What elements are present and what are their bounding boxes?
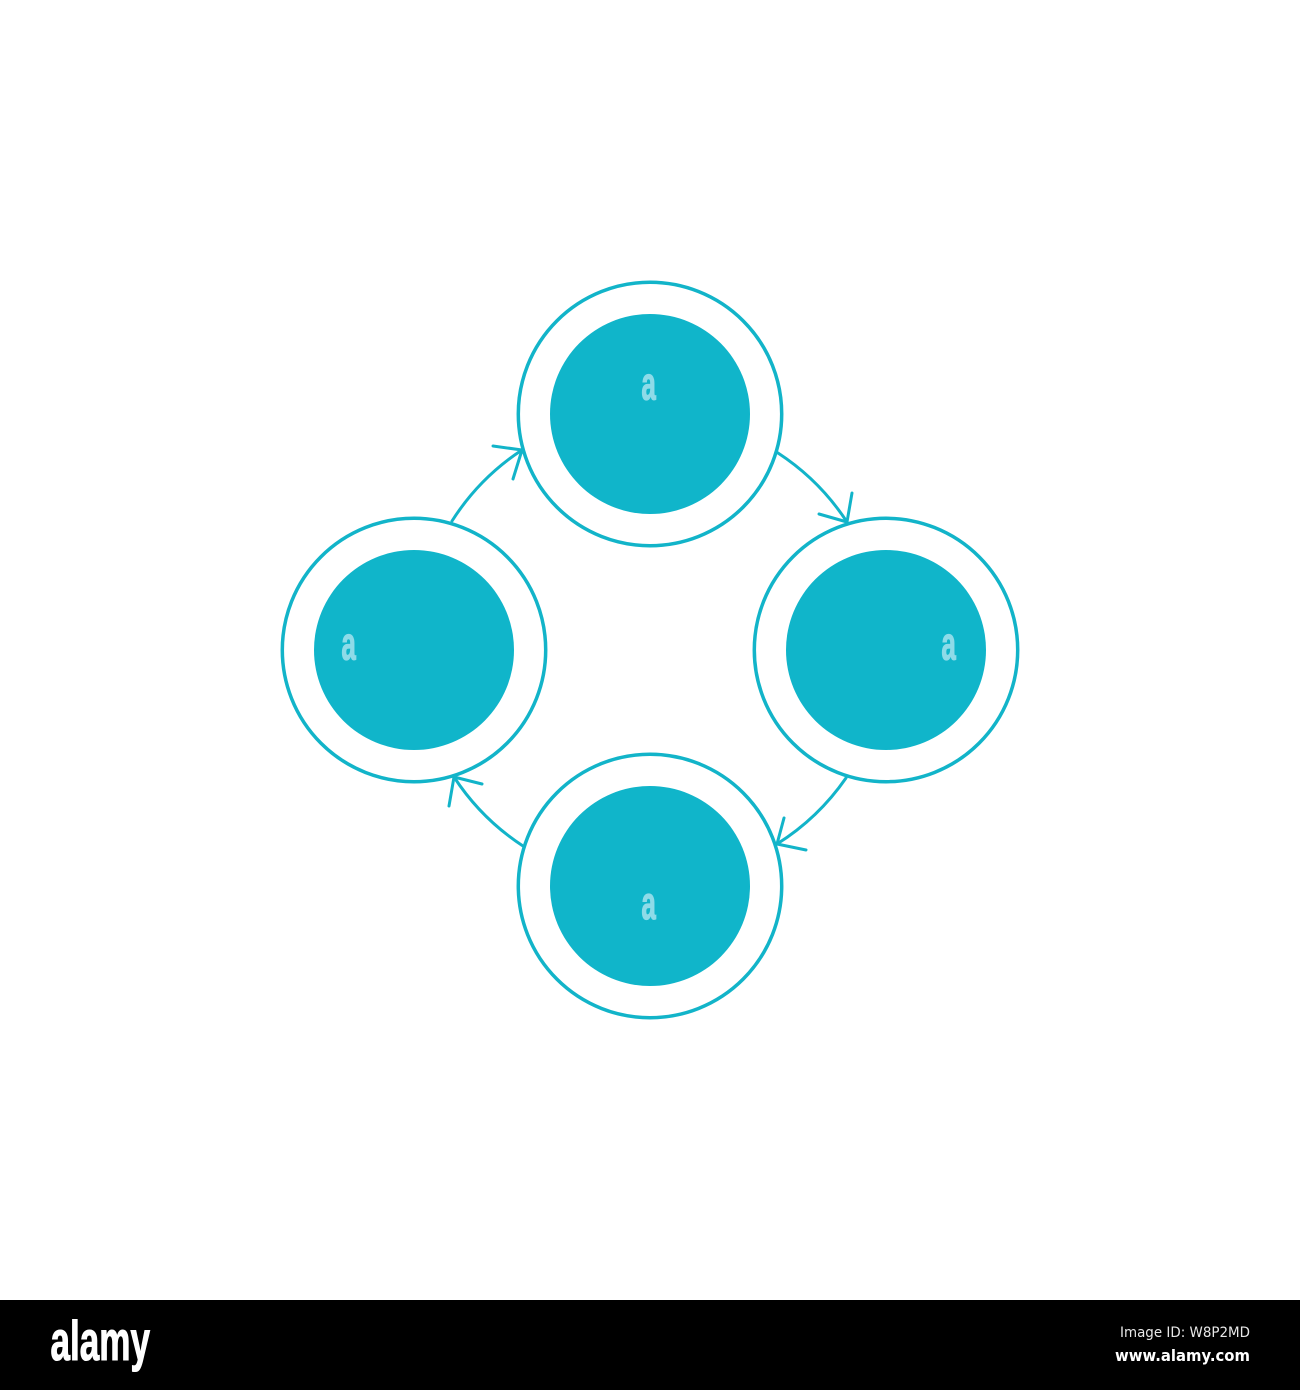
arrow: top to right <box>778 453 852 522</box>
node: right circle <box>754 518 1018 782</box>
node: left circle <box>282 518 546 782</box>
node: left circle: a <box>342 618 356 669</box>
node: top circle: a <box>642 358 656 409</box>
cycle diagram <box>282 282 1018 1018</box>
node: right circle: a <box>942 618 956 669</box>
footer image id: Image ID: W8P2MD <box>1120 1325 1250 1341</box>
footer band <box>0 1300 1300 1390</box>
footer url: www.alamy.com <box>1115 1346 1250 1365</box>
node: top circle <box>518 282 782 546</box>
arrow: bottom to left <box>449 777 523 846</box>
footer logo: alamy: alamy <box>50 1310 150 1372</box>
arrow: left to top <box>452 446 522 521</box>
node: bottom circle: a <box>642 877 656 929</box>
arrow: right to bottom <box>777 778 846 850</box>
node: bottom circle <box>518 754 782 1018</box>
